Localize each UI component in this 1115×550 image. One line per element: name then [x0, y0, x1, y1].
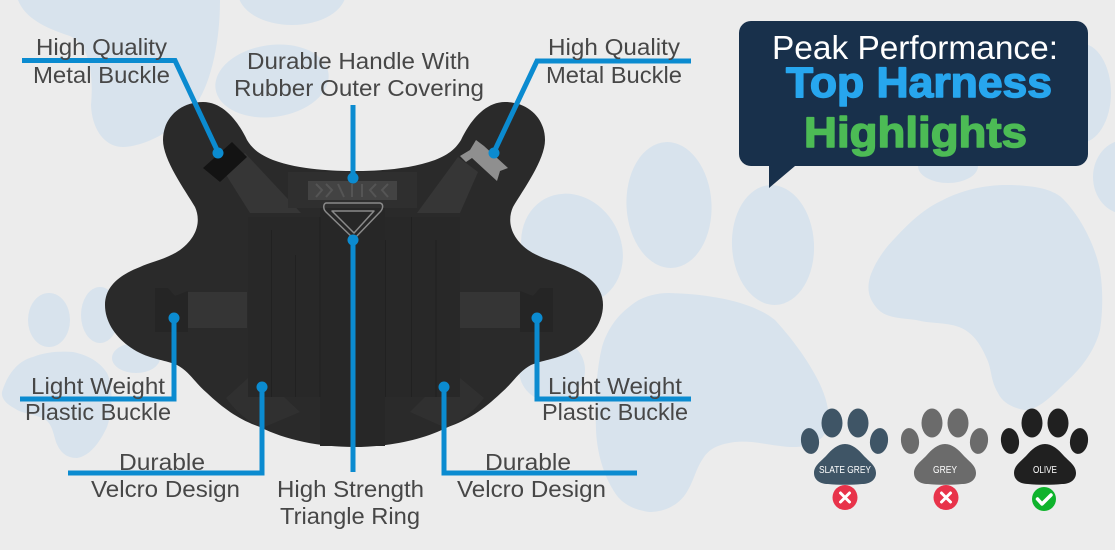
callout dots	[168, 148, 542, 392]
paw: grey: GREY	[933, 465, 957, 476]
label: durable handle: Rubber Outer Covering	[234, 75, 484, 101]
paw: olive: OLIVE	[1033, 465, 1057, 476]
label: high quality metal buckle left	[33, 34, 170, 88]
right shoulder strap	[417, 157, 478, 213]
label: high strength triangle ring	[277, 476, 424, 529]
label: high strength triangle ring: Triangle Ring	[280, 503, 420, 529]
title speech bubble	[739, 21, 1088, 188]
status: olive available	[1032, 487, 1056, 511]
right metal buckle	[460, 140, 508, 181]
left metal buckle	[203, 142, 247, 182]
label: durable handle: Durable Handle With	[247, 48, 470, 74]
label: high quality metal buckle left: Metal Buckle	[33, 62, 170, 88]
label: light weight plastic buckle right: Light Weight	[548, 373, 683, 399]
harness body	[105, 102, 603, 447]
bubble shape	[739, 21, 1088, 188]
label: durable velcro left: Durable	[119, 449, 205, 475]
velcro panels	[248, 205, 460, 446]
label: high quality metal buckle right: High Quality	[548, 34, 681, 60]
label: durable handle	[234, 48, 484, 101]
label: light weight plastic buckle left: Plastic Buckle	[25, 399, 171, 425]
paw: olive	[999, 408, 1090, 485]
paw: slate grey	[799, 408, 890, 485]
triangle ring	[324, 203, 383, 239]
left shoulder strap	[223, 153, 301, 213]
label: high quality metal buckle right	[546, 34, 682, 88]
label: light weight plastic buckle left: Light Weight	[31, 373, 166, 399]
paw: grey	[899, 408, 990, 485]
label: light weight plastic buckle right	[542, 373, 688, 425]
title line 1: Peak Performance:	[772, 29, 1058, 66]
label: durable velcro right: Velcro Design	[457, 476, 606, 502]
label: light weight plastic buckle right: Plastic Buckle	[542, 399, 688, 425]
status: slate grey unavailable	[832, 485, 858, 510]
side straps and plastic buckles	[155, 288, 553, 332]
rubber handle	[288, 172, 417, 208]
label: high quality metal buckle right: Metal Buckle	[546, 62, 682, 88]
paw: slate grey: SLATE GREY	[819, 465, 871, 476]
title line 2: Top Harness	[786, 59, 1052, 107]
label: high quality metal buckle left: High Quality	[36, 34, 168, 60]
label: light weight plastic buckle left	[25, 373, 171, 425]
title line 3: Highlights	[804, 109, 1027, 157]
label: high strength triangle ring: High Strength	[277, 476, 424, 502]
label: durable velcro left: Velcro Design	[91, 476, 240, 502]
lower side straps	[226, 378, 484, 428]
status: grey unavailable	[934, 485, 958, 510]
label: durable velcro left	[91, 449, 240, 502]
callout lines	[20, 60, 691, 473]
harness illustration	[105, 102, 603, 447]
label: durable velcro right	[457, 449, 606, 502]
label: durable velcro right: Durable	[485, 449, 571, 475]
